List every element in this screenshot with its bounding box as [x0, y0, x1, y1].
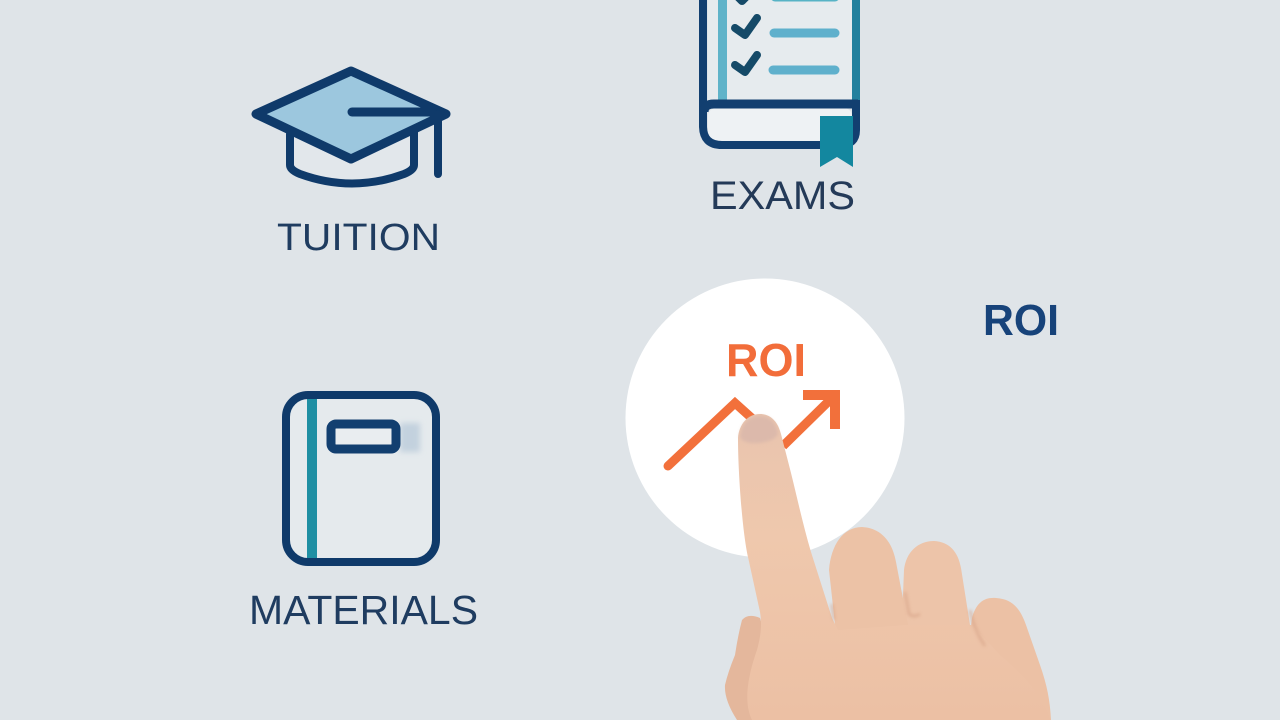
label: roi right: ROI: [983, 296, 1059, 345]
ring finger: [900, 541, 985, 670]
checklist lines: [773, 0, 835, 70]
finger valley shading: [832, 592, 985, 646]
icon: graduation cap: [256, 71, 446, 184]
pinky finger: [960, 598, 1051, 720]
fingernail: [740, 416, 778, 443]
index finger and palm: [738, 414, 1050, 720]
icon: exam book: [703, 0, 858, 167]
label: materials: MATERIALS: [249, 587, 478, 633]
check marks: [735, 0, 757, 72]
icon: growth arrow: [668, 395, 835, 466]
thumb: [725, 616, 790, 720]
label: exams: EXAMS: [710, 174, 855, 218]
icon: notebook: [286, 395, 436, 562]
hand pointing: [725, 414, 1051, 720]
bookmark: [820, 116, 853, 167]
middle finger: [829, 527, 908, 670]
callout: roi circle: [626, 278, 904, 558]
label: tuition: TUITION: [277, 217, 440, 259]
roi label: ROI: [726, 334, 806, 386]
